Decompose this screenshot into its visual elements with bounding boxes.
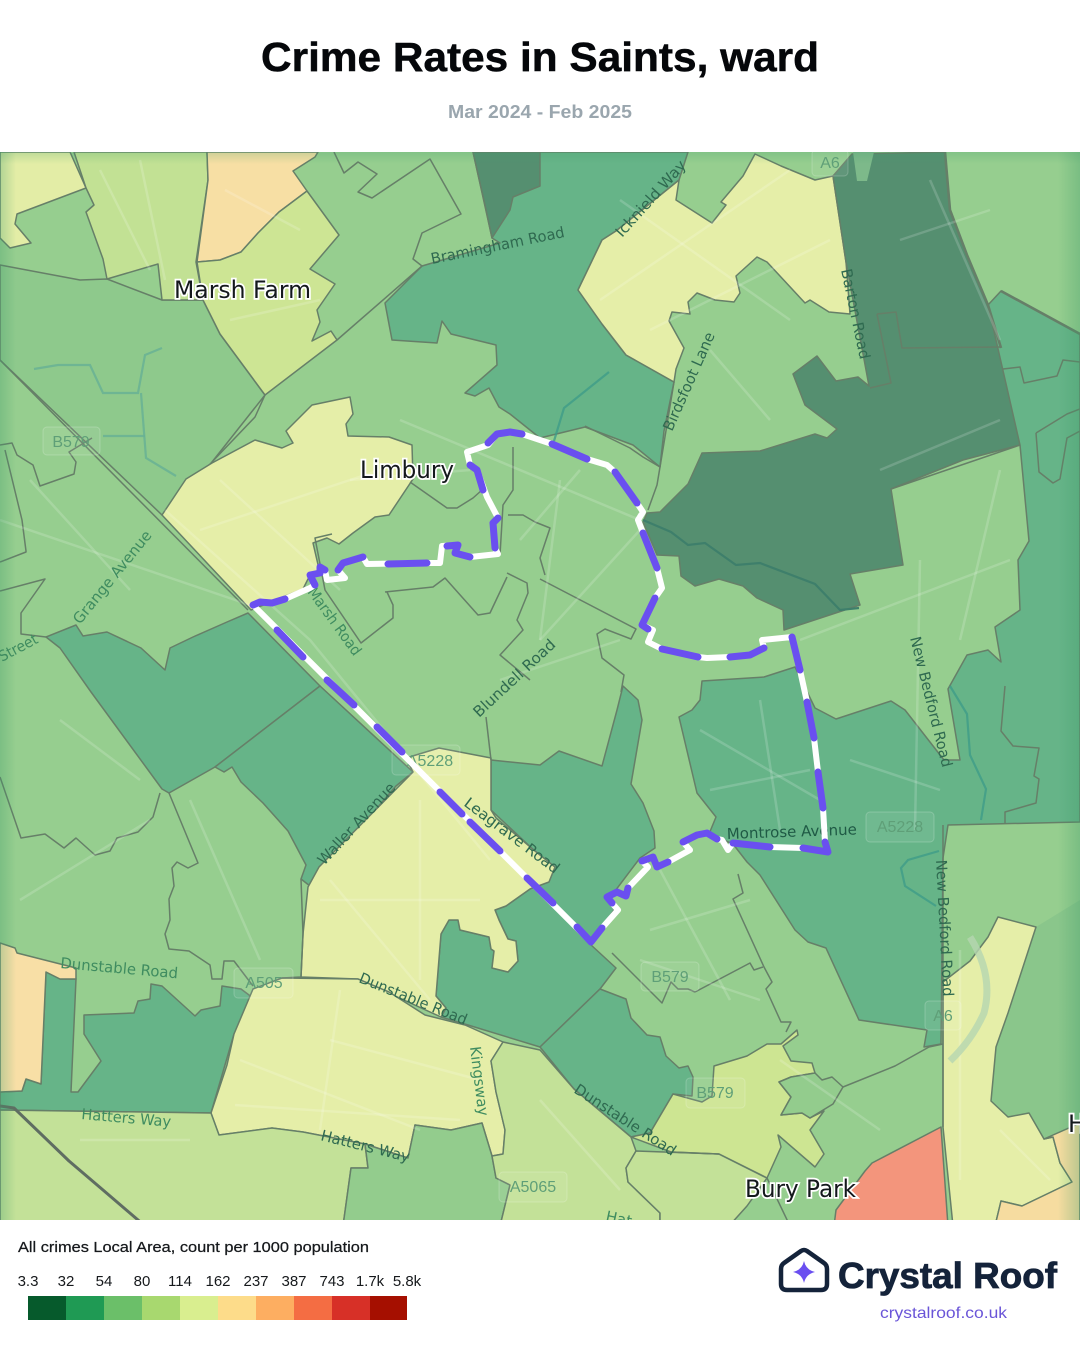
choropleth areas [0, 152, 1080, 1226]
road number badges: A5228 [407, 753, 453, 770]
logo: Crystal Roof [781, 1250, 1058, 1322]
road labels: Dunstable Road [60, 954, 179, 982]
road labels: Hatters Way [81, 1105, 172, 1131]
road number badges: A5065 [510, 1179, 556, 1196]
road number badges [43, 150, 961, 1202]
road labels: Grange Avenue [69, 527, 155, 628]
legend scale labels: 1.7k [356, 1273, 385, 1290]
road labels: Dunstable Road [357, 969, 470, 1029]
legend scale labels [18, 1273, 422, 1290]
road number badges: A5228 [877, 819, 923, 836]
road labels: Marsh Road [304, 584, 365, 659]
road labels: Kingsway [466, 1045, 492, 1117]
road labels [0, 156, 957, 1230]
road number badges: A505 [245, 975, 283, 992]
road labels: Hat [604, 1207, 634, 1230]
legend title: All crimes Local Area, count per 1000 population [18, 1239, 369, 1256]
minor streets [0, 160, 1050, 1190]
legend scale labels: 387 [281, 1273, 307, 1290]
legend scale labels: 3.3 [18, 1273, 38, 1290]
road labels: Icknield Way [612, 156, 690, 241]
Saints ward boundary [253, 432, 828, 942]
road labels: Birdsfoot Lane [659, 329, 719, 434]
road number badges: B579 [696, 1085, 734, 1102]
road number badges: B579 [651, 969, 689, 986]
road labels: New Bedford Road [906, 635, 956, 769]
logo wordmark: Crystal Roof [838, 1255, 1058, 1296]
legend colour bar [28, 1296, 407, 1320]
road labels: Waller Avenue [314, 779, 399, 869]
Montrose Avenue road label: Montrose Avenue [727, 820, 857, 843]
road labels: Blundell Road [469, 635, 559, 721]
legend scale labels: 54 [96, 1273, 112, 1290]
legend scale labels: 5.8k [393, 1273, 422, 1290]
road number badges: A6 [820, 155, 840, 172]
place labels: Limbury [360, 456, 454, 484]
road number badges: A6 [933, 1008, 953, 1025]
place labels: Bury Park [745, 1175, 856, 1203]
logo url: crystalroof.co.uk [880, 1305, 1008, 1322]
legend scale labels: 114 [168, 1273, 192, 1290]
road labels: Leagrave Road [461, 794, 563, 877]
road number badges: B579 [52, 434, 90, 451]
title: Crime Rates in Saints, ward [261, 34, 819, 80]
legend scale labels: 743 [319, 1273, 345, 1290]
legend scale labels: 162 [205, 1273, 231, 1290]
legend scale labels: 32 [58, 1273, 74, 1290]
road labels: New Bedford Road [932, 859, 957, 997]
icon: house with star [781, 1250, 827, 1290]
legend [18, 1239, 422, 1320]
road labels: Bramingham Road [429, 223, 566, 268]
subtitle: date range: Mar 2024 - Feb 2025 [448, 102, 632, 122]
ward sub-boundaries [0, 152, 1080, 1226]
road labels: Barton Road [837, 267, 874, 361]
place labels [174, 276, 1080, 1203]
road labels: Hatters Way [319, 1126, 412, 1166]
legend scale labels: 237 [243, 1273, 269, 1290]
place labels: Marsh Farm [174, 276, 311, 304]
legend scale labels: 80 [134, 1273, 150, 1290]
rivers [34, 348, 987, 1061]
map edge shading [0, 152, 1080, 1220]
road labels: Dunstable Road [571, 1080, 680, 1160]
